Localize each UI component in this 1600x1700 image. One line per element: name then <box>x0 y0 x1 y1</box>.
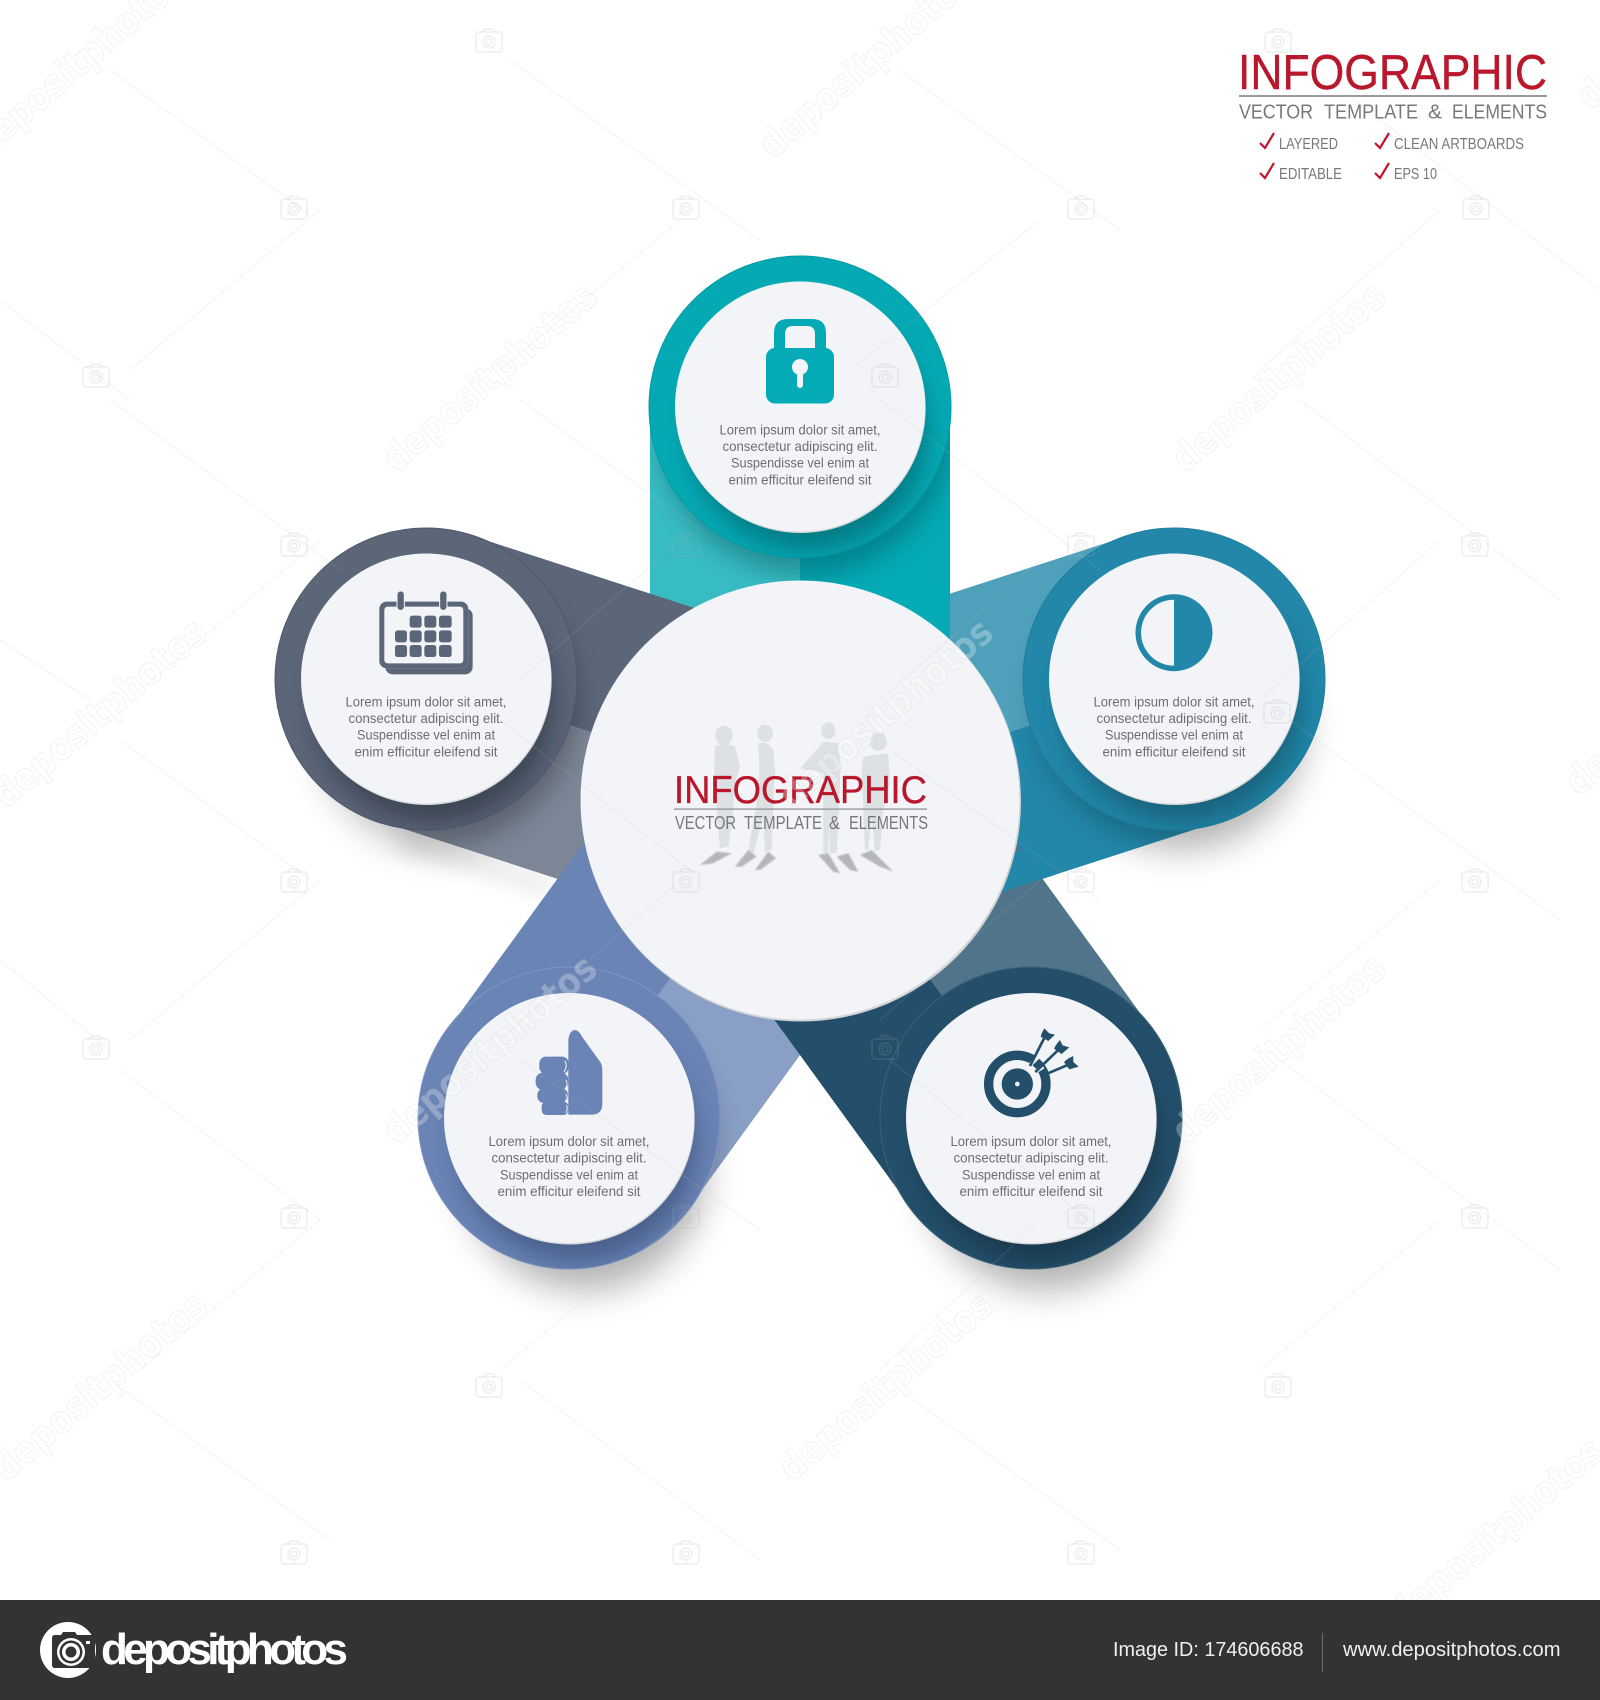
band: right <box>950 541 1198 879</box>
text: top: Lorem ipsum dolor sit amet, <box>720 421 880 437</box>
text: bottom right: consectetur adipiscing elit. <box>954 1150 1108 1166</box>
depositphotos watermarks: depositphotos <box>1163 274 1394 481</box>
hub title: TEMPLATE <box>744 813 822 833</box>
text: left: consectetur adipiscing elit. <box>348 710 504 726</box>
header subtitle: ELEMENTS <box>1452 101 1547 124</box>
depositphotos watermarks: depositphotos <box>374 274 605 481</box>
feature checklist: LAYERED <box>1279 136 1338 153</box>
text: left: Lorem ipsum dolor sit amet, <box>346 693 506 709</box>
text: right: Lorem ipsum dolor sit amet, <box>1094 693 1254 709</box>
petal: bottom right (target) <box>774 844 1182 1270</box>
text: top: Suspendisse vel enim at <box>731 455 869 471</box>
footer logo icon <box>40 1622 96 1678</box>
text: bottom left: Suspendisse vel enim at <box>500 1166 638 1182</box>
hub title: INFOGRAPHIC <box>674 769 927 812</box>
ring: bottom left <box>418 967 720 1269</box>
text: top: enim efficitur eleifend sit <box>728 471 872 487</box>
header logo block <box>1238 46 1547 183</box>
text: left <box>346 693 506 759</box>
text: left: enim efficitur eleifend sit <box>354 743 498 759</box>
disc: right <box>1049 554 1300 805</box>
feature checklist: CLEAN ARTBOARDS <box>1394 136 1524 153</box>
ring: left <box>275 528 577 830</box>
band overlap: right band over bottom right band <box>1001 850 1056 892</box>
petal: top (lock) <box>648 256 952 640</box>
icon: calendar <box>379 591 473 674</box>
ring: right <box>1023 528 1325 830</box>
hub title <box>674 769 928 833</box>
header subtitle <box>1239 101 1547 124</box>
text: bottom right: Lorem ipsum dolor sit amet, <box>950 1133 1112 1149</box>
depositphotos watermarks: depositphotos <box>770 1283 1001 1490</box>
text: bottom left <box>488 1133 650 1199</box>
text: top: consectetur adipiscing elit. <box>722 438 878 454</box>
depositphotos watermarks: depositphotos <box>374 946 605 1153</box>
header subtitle: TEMPLATE <box>1324 101 1418 124</box>
feature checklist: EDITABLE <box>1279 166 1342 183</box>
header subtitle: & <box>1428 101 1442 124</box>
icon: target with arrows <box>989 1028 1079 1113</box>
disc: bottom right <box>906 993 1157 1244</box>
ring: bottom right <box>880 967 1182 1269</box>
text: bottom right: enim efficitur eleifend sit <box>960 1183 1103 1199</box>
footer logo wordmark: depositphotos <box>101 1625 348 1674</box>
band: left <box>402 541 694 879</box>
ring: top <box>649 256 951 558</box>
feature checklist: EPS 10 <box>1394 166 1437 183</box>
text: bottom left: consectetur adipiscing elit. <box>492 1150 646 1166</box>
hub title: & <box>829 813 840 833</box>
icon: half circle contrast <box>1138 597 1210 668</box>
header title: INFOGRAPHIC <box>1238 46 1547 100</box>
footer image id: Image ID: 174606688 <box>1113 1639 1304 1661</box>
text: bottom left: Lorem ipsum dolor sit amet, <box>488 1133 650 1149</box>
silhouettes of business people <box>700 722 893 873</box>
petal: bottom left (thumbs up) <box>418 842 800 1270</box>
hub title: VECTOR <box>675 813 736 833</box>
text: left: Suspendisse vel enim at <box>357 727 495 743</box>
text: top <box>720 421 880 487</box>
central hub <box>580 580 1021 1022</box>
icon: thumbs up <box>536 1030 602 1115</box>
soft drop shadows under petals <box>320 601 1304 1290</box>
footer bar <box>0 1600 1600 1700</box>
petal: right (contrast) <box>950 528 1326 879</box>
text: right: Suspendisse vel enim at <box>1105 727 1243 743</box>
text: right: enim efficitur eleifend sit <box>1102 743 1246 759</box>
text: bottom right <box>950 1133 1112 1199</box>
hub disc <box>580 580 1021 1022</box>
text: bottom right: Suspendisse vel enim at <box>962 1166 1100 1182</box>
hub title: ELEMENTS <box>849 813 928 833</box>
text: right <box>1094 693 1254 759</box>
band: top <box>650 428 950 640</box>
icon: padlock <box>766 319 834 404</box>
text: right: consectetur adipiscing elit. <box>1096 710 1252 726</box>
disc: top <box>675 282 926 533</box>
footer website: www.depositphotos.com <box>1342 1639 1560 1661</box>
petal: left (calendar) <box>274 528 694 879</box>
disc: left <box>301 554 552 805</box>
band: bottom left <box>460 842 800 1188</box>
disc: bottom left <box>444 993 695 1244</box>
band: bottom right <box>774 844 1140 1190</box>
depositphotos watermarks: depositphotos <box>770 610 1001 817</box>
text: bottom left: enim efficitur eleifend sit <box>498 1183 641 1199</box>
feature checklist <box>1260 133 1524 183</box>
header subtitle: VECTOR <box>1239 101 1313 124</box>
depositphotos watermarks: depositphotos <box>1163 946 1394 1153</box>
